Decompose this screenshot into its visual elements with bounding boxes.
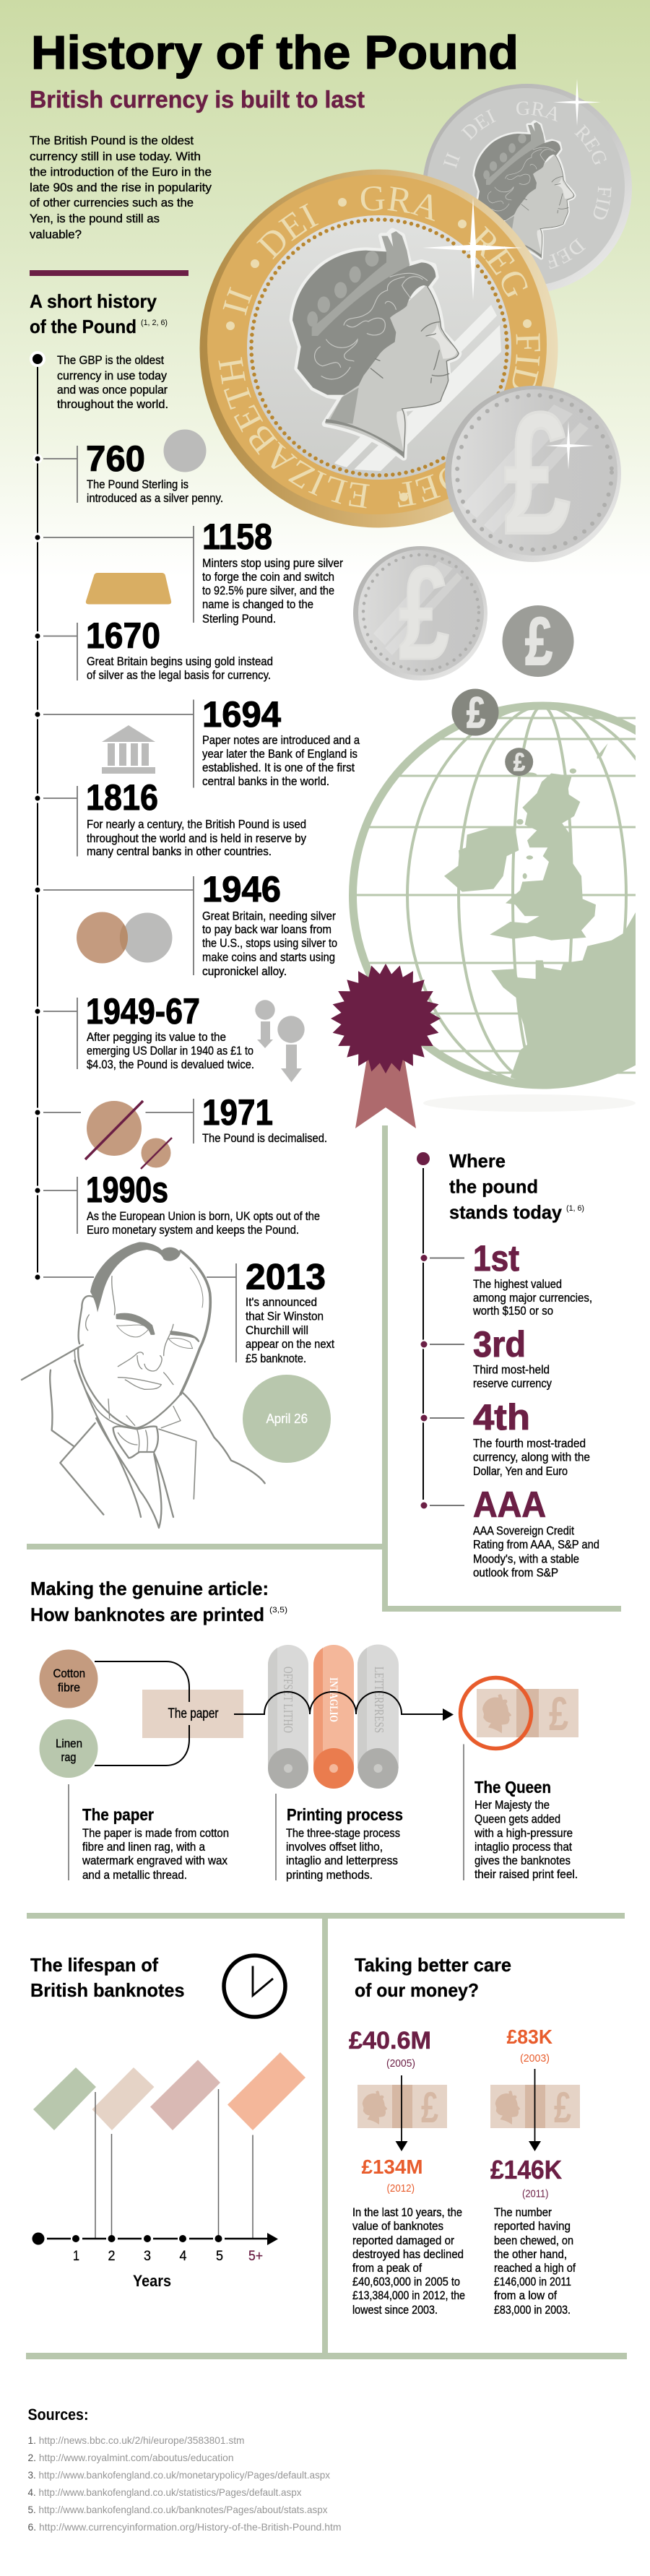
sources: 2. http://www.royalmint.com/aboutus/education xyxy=(27,2452,234,2463)
panel: taking better care of our money xyxy=(349,1954,580,2317)
icon: large gold and silver coin: GRA xyxy=(361,186,435,221)
event 1158: Sterling Pound. xyxy=(202,612,276,626)
event 1158: 1158 xyxy=(202,517,272,557)
event 1670: 1670 xyxy=(86,615,160,656)
event 760: introduced as a silver penny. xyxy=(87,491,223,505)
panel: taking better care of our money: £ xyxy=(554,2083,571,2132)
timeline spine: The GBP is the oldest xyxy=(57,353,164,367)
event 1949-67 xyxy=(34,991,305,1082)
event 2013: April 26 xyxy=(266,1412,308,1426)
event 1158: to forge the coin and switch xyxy=(202,570,334,584)
panel: where the pound stands today: worth $150 or so xyxy=(472,1304,553,1318)
event 1946: the U.S., stops using silver to xyxy=(202,936,337,950)
icon: globe xyxy=(352,688,650,1112)
event 1670 xyxy=(34,615,273,682)
text: the paper xyxy=(69,1784,229,1882)
text: the queen: with a high-pressure xyxy=(474,1826,573,1840)
icon: silver coin back: FID xyxy=(594,186,611,220)
event 1670: of silver as the legal basis for currency. xyxy=(87,668,271,682)
panel: taking better care of our money: £146,000 in 2011 xyxy=(494,2275,571,2288)
icon: globe: £ xyxy=(467,688,485,737)
panel: taking better care of our money: value of banknotes xyxy=(352,2219,443,2233)
panel: lifespan of banknotes: 1 xyxy=(73,2249,79,2264)
subtitle: British currency is built to last xyxy=(30,86,365,113)
timeline spine: throughout the world. xyxy=(57,397,168,411)
panel: where the pound stands today: AAA xyxy=(473,1484,546,1525)
history heading xyxy=(30,270,188,337)
panel: taking better care of our money: £40,603,000 in 2005 to xyxy=(352,2275,460,2288)
intro paragraph: late 90s and the rise in popularity xyxy=(30,181,212,194)
panel: lifespan of banknotes: 5 xyxy=(216,2249,223,2264)
panel: taking better care of our money: destroyed has declined xyxy=(352,2247,464,2261)
icon: silver coin back: GRA xyxy=(516,101,558,121)
history heading: (1, 2, 6) xyxy=(141,319,168,327)
panel: where the pound stands today: The fourth most-traded xyxy=(473,1436,586,1451)
panel: taking better care of our money: The number xyxy=(494,2205,552,2219)
panel: taking better care of our money: of our money? xyxy=(355,1979,479,2001)
panel: where the pound stands today: currency, along with the xyxy=(473,1451,590,1464)
icon: rosette badge xyxy=(331,964,441,1128)
icon: silver pound coin medium xyxy=(353,538,488,687)
event 760 xyxy=(34,429,223,505)
text: printing process: printing methods. xyxy=(286,1868,373,1882)
panel: taking better care of our money: reported damaged or xyxy=(352,2234,454,2247)
panel: where the pound stands today: stands today xyxy=(449,1201,563,1223)
panel: taking better care of our money: the other hand, xyxy=(494,2247,567,2261)
panel: where the pound stands today: 3rd xyxy=(473,1324,526,1365)
sources: 5. http://www.bankofengland.co.uk/banknotes/Pages/about/stats.aspx xyxy=(27,2504,327,2515)
event 1694: Paper notes are introduced and a xyxy=(202,733,360,747)
panel: taking better care of our money: £40.6M xyxy=(349,2027,431,2054)
panel: where the pound stands today: 1st xyxy=(473,1238,519,1279)
event 1946: Great Britain, needing silver xyxy=(202,909,336,923)
panel: lifespan of banknotes: Years xyxy=(133,2272,171,2290)
panel: where the pound stands today: Dollar, Yen and Euro xyxy=(473,1464,568,1478)
intro paragraph: Yen, is the pound still as xyxy=(30,212,160,225)
text: the queen: Her Majesty the xyxy=(474,1798,550,1812)
icon: silver pound coin medium: £ xyxy=(399,538,449,687)
text: the queen: Queen gets added xyxy=(474,1812,560,1826)
icon: large gold and silver coin: DEF xyxy=(397,468,446,507)
panel: taking better care of our money: (2005) xyxy=(386,2057,415,2070)
panel: taking better care of our money: (2012) xyxy=(387,2182,415,2195)
panel: lifespan of banknotes: 3 xyxy=(144,2249,151,2264)
event 1816 xyxy=(34,777,306,858)
panel: taking better care of our money: lowest since 2003. xyxy=(352,2303,438,2317)
event 1946: 1946 xyxy=(202,869,281,909)
event 1946: make coins and starts using xyxy=(202,951,335,964)
sources: 6. http://www.currencyinformation.org/History-of-the-British-Pound.htm xyxy=(27,2521,341,2533)
panel: taking better care of our money: reached a high of xyxy=(494,2261,576,2275)
panel: where the pound stands today: Where xyxy=(449,1150,506,1172)
panel: taking better care of our money: from a peak of xyxy=(352,2261,422,2275)
panel: taking better care of our money: (2011) xyxy=(522,2187,549,2200)
event 1946: cupronickel alloy. xyxy=(202,964,287,978)
history heading: A short history xyxy=(30,290,157,312)
diagram: printing rollers: INTAGLIO xyxy=(327,1677,339,1722)
text: the queen: their raised print feel. xyxy=(474,1867,578,1881)
heading: how banknotes are printed: Making the genuine article: xyxy=(30,1578,269,1599)
timeline spine: and was once popular xyxy=(57,383,168,397)
event 2013: £5 banknote. xyxy=(246,1352,306,1365)
event 1971: 1971 xyxy=(202,1092,273,1133)
icon: large gold and silver coin: ELIZABETH xyxy=(218,357,370,509)
event 2013: that Sir Winston xyxy=(246,1309,324,1323)
event 1694: year later the Bank of England is xyxy=(202,747,358,761)
diagram: banknote with queen: £ xyxy=(549,1687,568,1740)
diagram: printing rollers: LETTERPRESS xyxy=(372,1667,386,1733)
icon: silver coin back: DEF xyxy=(549,238,586,269)
event 1694 xyxy=(34,694,360,788)
event 1816: 1816 xyxy=(86,777,158,818)
sources: 4. http://www.bankofengland.co.uk/statistics/Pages/default.aspx xyxy=(27,2486,302,2498)
event 2013: Churchill will xyxy=(246,1323,308,1337)
event 1949-67: 1949-67 xyxy=(86,991,200,1032)
event 1158 xyxy=(34,517,343,626)
event 1816: throughout the world and is held in reserve by xyxy=(87,831,306,845)
panel: lifespan of banknotes: 5+ xyxy=(248,2249,263,2264)
diagram: banknote with queen xyxy=(461,1677,578,1748)
sources: Sources: xyxy=(27,2406,88,2424)
panel: lifespan of banknotes: British banknotes xyxy=(30,1979,185,2001)
event 1949-67: After pegging its value to the xyxy=(87,1030,226,1044)
diagram: paper inputs: Cotton xyxy=(53,1667,85,1680)
text: printing process: intaglio and letterpress xyxy=(286,1854,398,1867)
icon: silver coin back xyxy=(423,79,632,291)
panel: taking better care of our money: In the last 10 years, the xyxy=(352,2205,462,2219)
sources: 3. http://www.bankofengland.co.uk/monetarypolicy/Pages/default.aspx xyxy=(27,2469,330,2481)
text: printing process: The three-stage process xyxy=(286,1826,400,1840)
panel: lifespan of banknotes: The lifespan of xyxy=(30,1954,158,1976)
icon: large gold and silver coin: II xyxy=(222,286,253,315)
panel: taking better care of our money: £146K xyxy=(490,2155,562,2184)
text: the paper: The paper xyxy=(82,1805,154,1824)
icon: small grey pound coin: £ xyxy=(525,603,552,679)
panel: where the pound stands today: reserve currency xyxy=(473,1377,552,1390)
event 1158: name is changed to the xyxy=(202,597,313,611)
timeline spine xyxy=(31,353,168,1277)
intro paragraph: currency still in use today. With xyxy=(30,150,201,163)
panel: lifespan of banknotes xyxy=(30,1954,306,2290)
diagram: printing rollers xyxy=(234,1644,454,1789)
intro paragraph: valuable? xyxy=(30,228,82,241)
event 1816: For nearly a century, the British Pound is used xyxy=(87,818,306,831)
panel: where the pound stands today: Rating from AAA, S&P and xyxy=(473,1537,599,1552)
event 1816: many central banks in other countries. xyxy=(87,844,272,858)
event 1949-67: emerging US Dollar in 1940 as £1 to xyxy=(87,1044,254,1058)
panel: taking better care of our money: £ xyxy=(421,2083,438,2132)
sources: 1. http://news.bbc.co.uk/2/hi/europe/3583801.stm xyxy=(27,2434,244,2446)
icon: large gold and silver coin: FID xyxy=(513,333,540,388)
event 1694: established. It is one of the first xyxy=(202,761,355,774)
icon: silver coin back: REG xyxy=(575,124,607,165)
text: the paper: The paper is made from cotton xyxy=(82,1826,229,1840)
title: History of the Pound xyxy=(31,26,519,79)
panel: where the pound stands today: 4th xyxy=(473,1397,530,1438)
icon: silver pound coin large: £ xyxy=(504,376,571,570)
event 2013: It's announced xyxy=(246,1295,317,1309)
diagram: paper inputs xyxy=(39,1650,243,1778)
icon: silver coin back: DEI xyxy=(461,109,496,140)
panel: taking better care of our money: been chewed, on xyxy=(494,2234,573,2247)
icon: small grey pound coin xyxy=(503,603,573,679)
event 1694: central banks in the world. xyxy=(202,774,329,788)
panel: where the pound stands today: among major currencies, xyxy=(473,1291,592,1305)
text: the queen: gives the banknotes xyxy=(474,1854,571,1867)
text: the queen xyxy=(464,1744,578,1881)
event 1990s: 1990s xyxy=(86,1170,168,1210)
heading: how banknotes are printed: (3,5) xyxy=(269,1606,287,1615)
event 1158: Minters stop using pure silver xyxy=(202,556,343,570)
panel: taking better care of our money: (2003) xyxy=(520,2052,550,2065)
panel: taking better care of our money: £13,384,000 in 2012, the xyxy=(352,2288,465,2302)
heading: how banknotes are printed: How banknotes are printed xyxy=(30,1604,264,1625)
event 1946 xyxy=(34,869,337,978)
panel: where the pound stands today: Third most-held xyxy=(473,1362,550,1377)
timeline spine: currency in use today xyxy=(57,368,167,383)
event 2013: appear on the next xyxy=(246,1337,334,1351)
intro paragraph: the introduction of the Euro in the xyxy=(30,165,212,179)
intro paragraph: The British Pound is the oldest xyxy=(30,134,194,147)
event 1990s: Euro monetary system and keeps the Pound. xyxy=(87,1223,299,1237)
icon: large gold and silver coin: REG xyxy=(469,225,528,297)
icon: large gold and silver coin xyxy=(199,169,558,527)
icon: large gold and silver coin: DEI xyxy=(256,204,319,259)
event 1949-67: $4.03, the Pound is devalued twice. xyxy=(87,1058,254,1071)
panel: taking better care of our money: from a low of xyxy=(494,2288,557,2302)
icon: silver pound coin large xyxy=(445,376,621,570)
event 1694: 1694 xyxy=(202,694,281,735)
text: the paper: and a metallic thread. xyxy=(82,1868,187,1882)
event 1670: Great Britain begins using gold instead xyxy=(87,654,273,668)
sources xyxy=(27,2406,341,2533)
panel: where the pound stands today: Moody's, with a stable xyxy=(473,1552,579,1566)
event 2013: 2013 xyxy=(246,1257,326,1297)
panel: where the pound stands today xyxy=(417,1150,599,1579)
event 1971 xyxy=(34,1092,327,1169)
panel: taking better care of our money: £134M xyxy=(361,2156,423,2178)
diagram: printing rollers: OFFSET LITHO xyxy=(281,1667,295,1733)
event 760: The Pound Sterling is xyxy=(87,477,188,491)
diagram: paper inputs: Linen xyxy=(56,1737,82,1750)
panel: lifespan of banknotes: 4 xyxy=(179,2249,187,2264)
panel: taking better care of our money: £83K xyxy=(507,2026,552,2048)
panel: lifespan of banknotes: 2 xyxy=(108,2249,116,2264)
icon: silver coin back: II xyxy=(443,152,460,168)
text: printing process xyxy=(276,1794,403,1882)
diagram: paper inputs: rag xyxy=(61,1750,77,1764)
panel: where the pound stands today: the pound xyxy=(449,1176,538,1198)
event 1971: The Pound is decimalised. xyxy=(202,1131,327,1145)
history heading: of the Pound xyxy=(30,316,136,337)
diagram: paper inputs: fibre xyxy=(58,1680,80,1695)
event 760: 760 xyxy=(86,438,145,479)
text: the paper: fibre and linen rag, with a xyxy=(82,1840,205,1854)
intro paragraph: of other currencies such as the xyxy=(30,196,194,209)
heading: how banknotes are printed xyxy=(30,1578,287,1625)
panel: taking better care of our money: £83,000 in 2003. xyxy=(494,2303,571,2317)
illustration: Winston Churchill xyxy=(22,1242,265,1528)
event 1158: to 92.5% pure silver, and the xyxy=(202,584,334,597)
text: printing process: involves offset litho, xyxy=(286,1840,383,1854)
event 1990s xyxy=(34,1170,320,1237)
text: printing process: Printing process xyxy=(287,1805,403,1824)
panel: taking better care of our money: reported having xyxy=(494,2219,571,2233)
event 2013 xyxy=(34,1257,334,1463)
text: the queen: The Queen xyxy=(474,1778,551,1797)
panel: where the pound stands today: The highest valued xyxy=(473,1277,562,1291)
panel: where the pound stands today: outlook from S&P xyxy=(473,1566,558,1579)
section frames xyxy=(26,1125,627,2359)
text: the queen: intaglio process that xyxy=(474,1840,572,1854)
icon: globe: £ xyxy=(514,748,525,777)
event 1990s: As the European Union is born, UK opts out of the xyxy=(87,1209,320,1223)
intro paragraph xyxy=(30,134,212,241)
background gradient xyxy=(0,0,650,578)
panel: taking better care of our money: Taking better care xyxy=(355,1954,511,1976)
panel: where the pound stands today: (1, 6) xyxy=(566,1204,584,1213)
event 1946: to pay back war loans from xyxy=(202,922,332,936)
diagram: paper inputs: The paper xyxy=(168,1706,219,1721)
text: the paper: watermark engraved with wax xyxy=(82,1854,228,1867)
panel: where the pound stands today: AAA Sovereign Credit xyxy=(473,1524,574,1537)
